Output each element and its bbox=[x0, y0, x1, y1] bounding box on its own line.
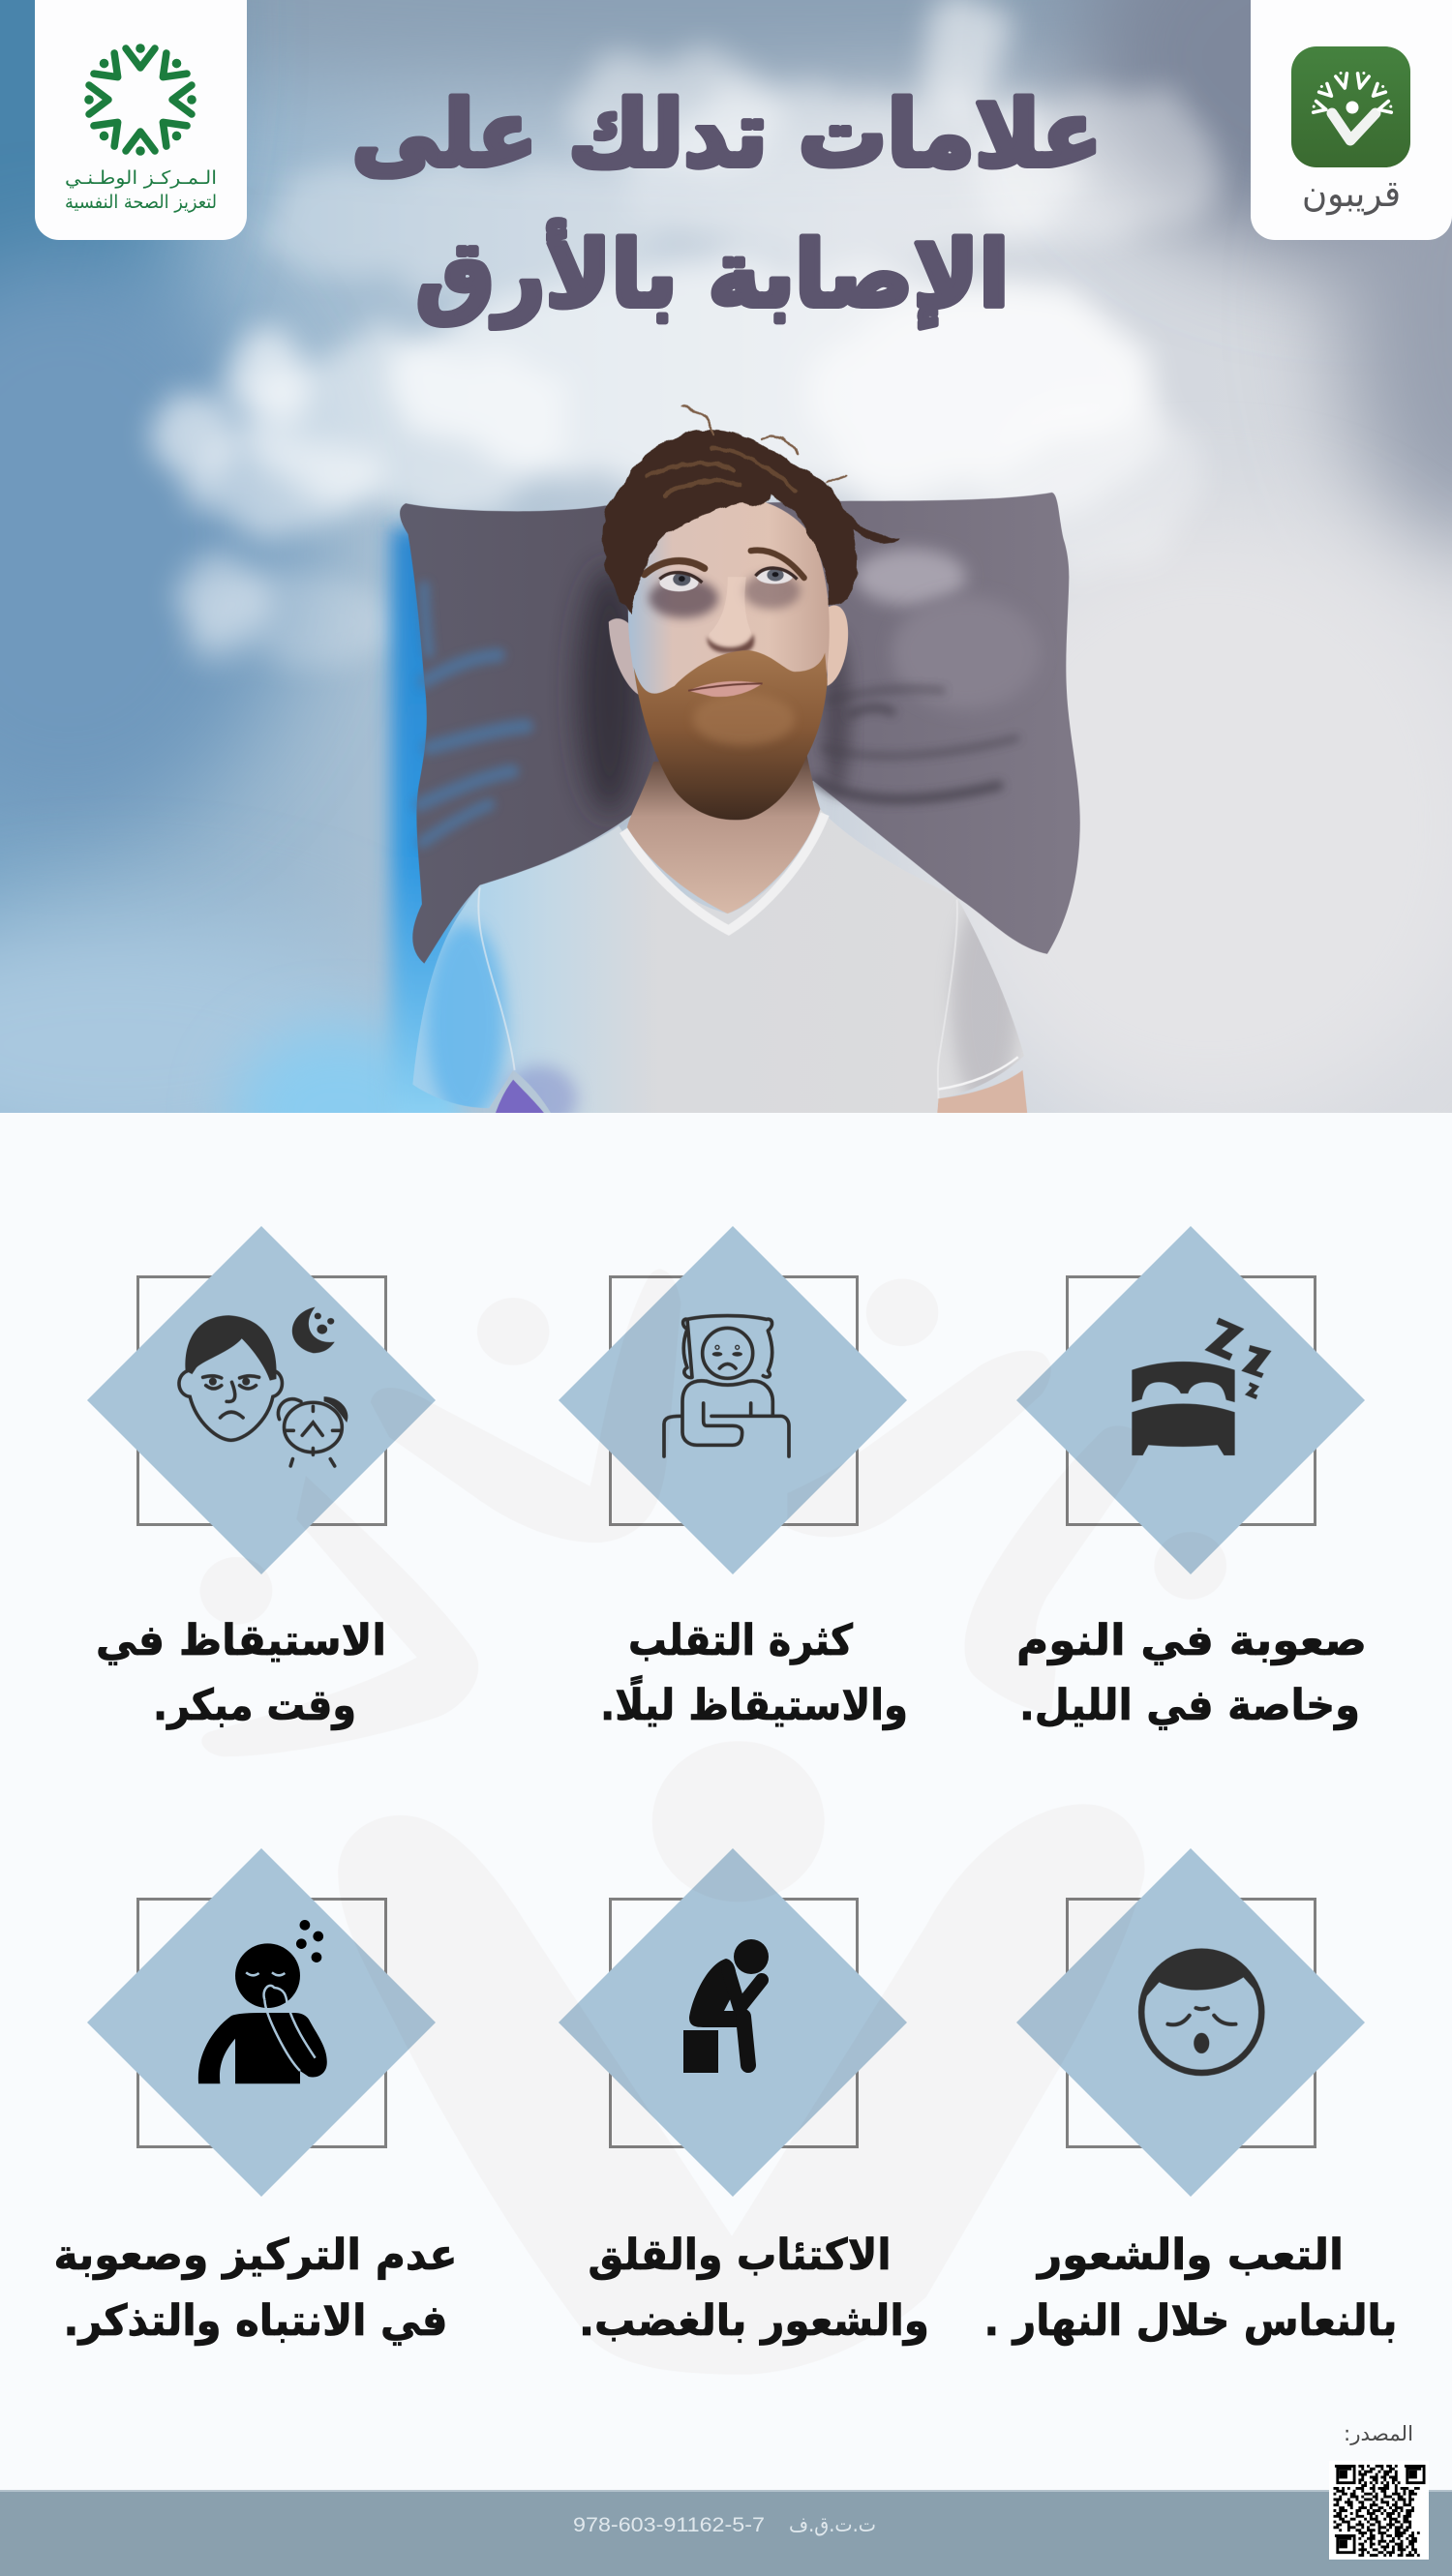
title: الإصابة بالأرق bbox=[416, 221, 1009, 328]
label: daytime fatigue: بالنعاس خلال النهار . bbox=[983, 2296, 1398, 2346]
label: waking early: وقت مبكر. bbox=[153, 1681, 356, 1730]
label: daytime fatigue bbox=[983, 2231, 1398, 2346]
forearm bbox=[937, 1070, 1028, 1113]
ISBN text: 978-603-91162-5-7 bbox=[573, 2514, 765, 2536]
label: tossing and turning bbox=[600, 1616, 908, 1730]
icon: person sitting, head in hands bbox=[683, 1939, 769, 2073]
label: depression and anxiety: والشعور بالغضب. bbox=[579, 2296, 929, 2346]
man and pillow bbox=[400, 407, 1080, 1132]
blue shadow beside pillow bbox=[391, 527, 459, 1127]
label: daytime fatigue: التعب والشعور bbox=[1036, 2231, 1344, 2280]
label: tossing and turning: والاستيقاظ ليلًا. bbox=[600, 1674, 908, 1730]
right logo card: Qareeboon bbox=[1251, 0, 1452, 240]
icon: person in bed with tired face bbox=[664, 1316, 789, 1456]
item labels bbox=[54, 1616, 1398, 2346]
hair bbox=[603, 407, 899, 615]
icon: yawning person with thought dots bbox=[198, 1920, 327, 2083]
head bbox=[609, 495, 848, 820]
pillow bbox=[400, 493, 1080, 964]
icon: tired man, moon and alarm clock bbox=[179, 1307, 348, 1466]
app icon bbox=[1291, 46, 1410, 167]
wall background bbox=[0, 0, 1452, 1200]
t-shirt bbox=[412, 809, 1024, 1132]
label: depression and anxiety bbox=[579, 2231, 929, 2346]
neck bbox=[627, 752, 820, 914]
logo text: الـمـركـز الوطـنـي bbox=[65, 167, 217, 189]
label: difficulty sleeping bbox=[1016, 1616, 1367, 1730]
logo text bbox=[65, 167, 217, 213]
label: poor concentration: في الانتباه والتذكر. bbox=[64, 2296, 447, 2346]
source label: المصدر: bbox=[1344, 2422, 1413, 2445]
diamonds bbox=[87, 1226, 1365, 2197]
logo emblem bbox=[84, 44, 197, 156]
label: poor concentration bbox=[54, 2231, 457, 2346]
hero photo: man with pillow against a cloudy wall bbox=[0, 0, 1452, 1200]
label: difficulty sleeping: صعوبة في النوم bbox=[1016, 1616, 1367, 1665]
clouds bbox=[155, 0, 1220, 673]
purple cushion bbox=[496, 1080, 544, 1113]
icon: bed with Zzz bbox=[1132, 1318, 1272, 1455]
faint background logo watermark bbox=[200, 1270, 1226, 2375]
title: علامات تدلك على bbox=[352, 82, 1102, 188]
left logo card: National Center for Mental Health Promotion bbox=[35, 0, 247, 240]
logo text: لتعزيز الصحة النفسية bbox=[65, 192, 217, 213]
QR code bbox=[1329, 2461, 1429, 2560]
label: difficulty sleeping: وخاصة في الليل. bbox=[1019, 1681, 1360, 1730]
label: tossing and turning: كثرة التقلب bbox=[628, 1616, 853, 1665]
icon: sleepy face bbox=[1141, 1949, 1261, 2073]
outlined squares behind diamonds bbox=[137, 1277, 1315, 2146]
label: poor concentration: عدم التركيز وصعوبة bbox=[54, 2231, 457, 2280]
brand name: قريبون bbox=[1302, 172, 1401, 216]
label: waking early: الاستيقاظ في bbox=[96, 1616, 386, 1665]
ISBN label: ت.ت.ق.ف bbox=[789, 2513, 876, 2536]
footer bar bbox=[0, 2490, 1452, 2576]
title bbox=[352, 82, 1102, 328]
label: waking early bbox=[96, 1616, 386, 1730]
label: depression and anxiety: الاكتئاب والقلق bbox=[589, 2231, 891, 2280]
